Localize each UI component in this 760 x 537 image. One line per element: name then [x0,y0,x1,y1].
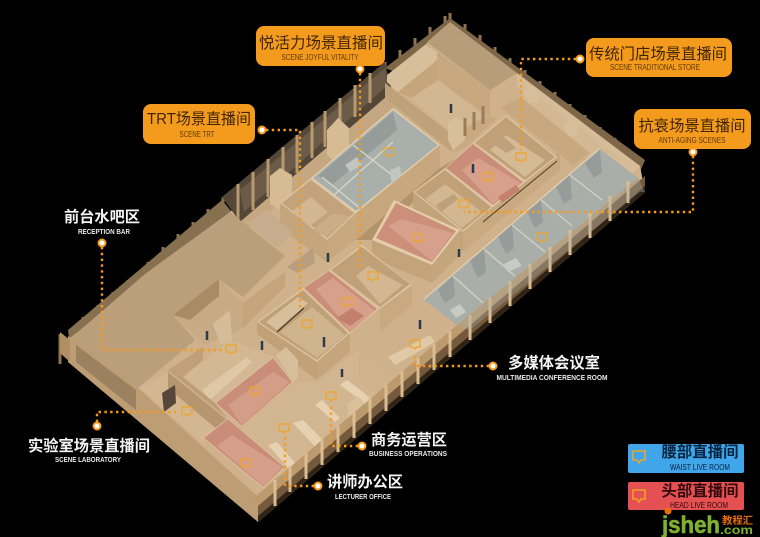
label: laboratory: SCENE LABORATORY [55,455,121,464]
isometric building [60,13,645,522]
callout: traditional store: SCENE TRADITIONAL STORE [610,63,700,72]
reception desk room [168,340,273,440]
callout: joyful vitality: 悦活力场景直播间 [259,35,383,52]
pink room lower middle [215,347,298,427]
glass band north-west [222,62,392,222]
callout: TRT: SCENE TRT [180,130,215,139]
north-east long room [500,73,640,174]
callout: anti-aging [634,109,751,149]
lab floor [140,372,225,442]
watermark logo [661,508,753,537]
callout: joyful vitality: SCENE JOYFUL VITALITY [282,53,359,62]
legend: waist live room: WAIST LIVE ROOM [670,463,730,472]
tan room lower right [413,150,560,252]
legend: waist live room: 腰部直播间 [662,443,738,461]
small tan rooms [280,178,356,262]
building base floor [70,24,645,522]
outer fins north-east [450,13,630,164]
legend: head live room [628,482,744,510]
blue room cluster [311,108,440,218]
corridor walls [356,145,470,240]
tan room center lower [257,288,350,380]
label: reception bar: 前台水吧区 [64,208,140,226]
outer fins north-west [60,16,445,364]
callout: anti-aging: 抗衰场景直播间 [638,118,746,135]
pink room lower left [203,418,285,488]
label: reception bar: RECEPTION BAR [78,227,130,236]
legend: head live room: HEAD LIVE ROOM [670,501,728,510]
watermark logo: 教程汇 [722,514,753,527]
label: business operations: BUSINESS OPERATIONS [369,449,447,458]
label: multimedia conference room: 多媒体会议室 [508,354,600,372]
glass lounges [247,210,315,273]
pink room center left [303,270,379,333]
label: lecturer office: LECTURER OFFICE [335,492,391,501]
reception roof [70,212,285,388]
callout: anti-aging: ANTI-AGING SCENES [658,136,726,145]
watermark logo: .com [720,523,753,537]
callout: TRT: TRT场景直播间 [147,111,251,128]
label: multimedia conference room: MULTIMEDIA CONFERENCE ROOM [496,373,608,382]
label: laboratory [28,437,150,464]
legend: head live room: 头部直播间 [662,482,738,500]
label: reception bar [64,208,140,236]
south-east wall [255,176,645,522]
label: laboratory: 实验室场景直播间 [28,437,150,455]
label: multimedia conference room [496,354,608,382]
pink room upper right [445,143,525,207]
tan room upper right [473,115,557,222]
top roof [427,22,517,90]
callout: TRT [143,104,255,144]
label: lecturer office [327,473,403,501]
label: lecturer office: 讲师办公区 [327,473,403,491]
north-west strip with furniture [240,92,395,228]
reception notch [173,272,285,345]
conference front wall [358,350,390,404]
callout: traditional store: 传统门店场景直播间 [589,46,727,63]
blue wash over the upper part of the wall [457,178,645,330]
callout: joyful vitality [256,26,385,66]
south-west wall [60,332,258,522]
people [207,104,473,377]
work area [242,350,400,485]
callout: traditional store [586,38,732,77]
top room [385,45,497,152]
legend: waist live room [628,443,744,473]
label: business operations: 商务运营区 [371,431,447,449]
center pink room [372,200,460,283]
label: business operations [369,431,447,458]
pillar blocks [270,168,292,212]
tan room center [329,245,412,332]
low back wall north-west [68,200,240,345]
chat icons [182,148,547,468]
leader lines [94,56,696,490]
blue row [424,149,638,325]
conference room [367,308,445,378]
